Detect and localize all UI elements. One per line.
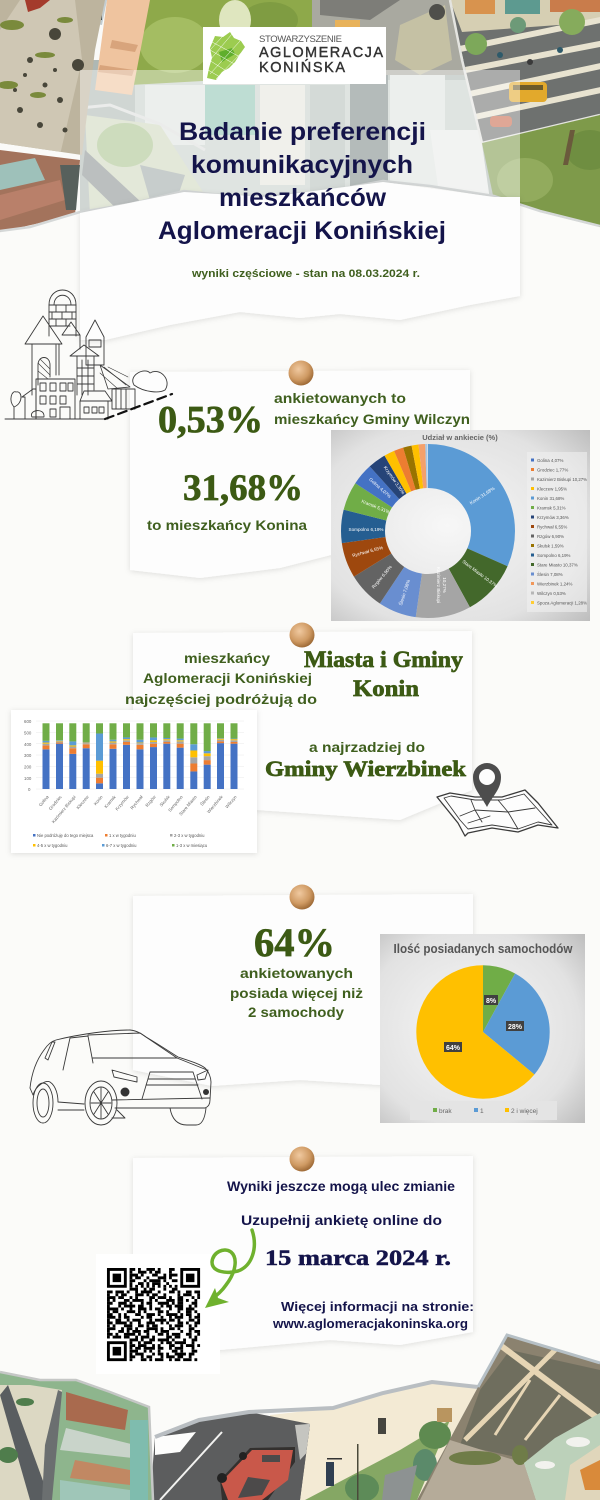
bar labels: Ślesin	[199, 794, 211, 807]
title	[158, 118, 446, 245]
donut legend: Grodziec 1,77%	[537, 468, 568, 472]
donut legend: Golina 4,07%	[537, 458, 563, 463]
green centre top	[130, 0, 320, 85]
bar legend: 1-3 x w miesiącu	[176, 843, 208, 848]
axis: 500	[24, 730, 32, 736]
illustration: buildings	[5, 290, 172, 419]
text: ankietowanych Wilczyn: ankietowanych to	[274, 391, 406, 406]
text: own more than 2 cars	[230, 966, 363, 1020]
icon: map with pin	[437, 763, 558, 836]
text: fill in survey: Uzupełnij ankietę online do	[241, 1213, 442, 1228]
donut labels	[348, 465, 498, 606]
bar labels: Rzgów	[144, 794, 157, 808]
pie labels: 64%	[446, 1045, 461, 1052]
donut legend: Kazimierz Biskupi 10,27%	[537, 477, 587, 482]
pie legend: 2 i więcej	[511, 1108, 538, 1115]
bar labels: Sompolno	[167, 794, 184, 813]
pin 1	[288, 360, 314, 386]
donut legend: Rzgów 6,90%	[537, 534, 564, 539]
donut labels: Rychwał 6,55%	[352, 545, 384, 558]
donut labels: Stare Miasto 10,37%	[461, 559, 498, 589]
title: Aglomeracji Konińskiej	[158, 217, 446, 245]
logo: STOWARZYSZENIE	[259, 34, 342, 45]
bar labels: Skulsk	[159, 794, 171, 808]
axis: 400	[24, 742, 32, 747]
stat: 0,53%: 0,53%	[158, 399, 263, 441]
text: results may change: Wyniki jeszcze mogą ulec zmianie	[227, 1179, 456, 1194]
donut legend: Kleczew 1,95%	[537, 486, 567, 492]
axis: 600	[24, 719, 32, 724]
text: more information: www.aglomeracjakoninska.org	[272, 1316, 468, 1331]
logo mark	[207, 32, 245, 80]
text: residents travel most often to: Aglomeracji Konińskiej	[143, 671, 312, 686]
right street piece	[450, 0, 600, 143]
bar labels: Kazimierz Biskupi	[51, 794, 77, 824]
text: own more than 2 cars: 2 samochody	[248, 1005, 345, 1020]
donut chart: share in survey: Udział w ankiecie (%)	[422, 433, 498, 442]
pie chart: number of cars: Ilość posiadanych samochodów	[394, 942, 573, 956]
park left middle	[85, 115, 205, 215]
pie labels	[444, 995, 524, 1052]
bar labels: Kleczew	[75, 794, 90, 810]
donut legend: Krzymów 3,36%	[537, 515, 569, 520]
donut legend: Kramsk 5,31%	[537, 506, 566, 510]
pin 4	[290, 1146, 314, 1172]
text: more information: Więcej informacji na stronie:	[281, 1299, 474, 1314]
pie slices	[450, 999, 516, 1065]
axis	[24, 719, 244, 792]
pie chart: number of cars	[380, 934, 585, 1123]
bar labels: Stare Miasto	[178, 794, 198, 817]
donut legend: Rychwał 6,55%	[537, 524, 567, 530]
pie legend	[410, 1101, 557, 1120]
heading: Gminy Wierzbinek: Gminy Wierzbinek	[265, 756, 467, 781]
panel: sheet 3	[133, 894, 473, 1086]
green lower right	[482, 115, 600, 232]
stat: 31,68%: 31,68%	[183, 468, 303, 509]
bar labels: Wierzbinek	[206, 794, 224, 814]
text: residents travel most often to: mieszkańcy	[184, 651, 271, 666]
sand and park	[270, 1382, 478, 1500]
stacked bar chart	[11, 710, 257, 853]
paper band: translucent title panel	[80, 70, 520, 240]
bar legend: Nie podróżuję do tego miejsca	[37, 833, 94, 838]
arrow: curly green to QR	[205, 1230, 254, 1308]
road	[150, 1412, 310, 1500]
bars	[42, 723, 238, 789]
donut legend	[527, 452, 587, 612]
left street piece	[0, 1372, 153, 1500]
heading: Miasta i Gminy Konin	[304, 647, 464, 701]
pie legend: 1	[480, 1108, 484, 1115]
donut chart: share in survey	[331, 430, 590, 621]
logo: KONIŃSKA	[259, 59, 345, 76]
bar legend: 4-5 x w tygodniu	[37, 843, 68, 848]
bar labels: Golina	[38, 794, 50, 807]
donut legend: Spoza Aglomeracji 1,28%	[537, 600, 587, 606]
pin 2	[290, 622, 314, 648]
bar labels: Konin	[93, 794, 104, 806]
bar labels: Rychwał	[129, 794, 144, 810]
green corner	[524, 1413, 600, 1500]
donut legend: Ślesin 7,08%	[537, 572, 563, 577]
bar legend: 1 x w tygodniu	[109, 833, 136, 838]
heading: Miasta i Gminy Konin: Miasta i Gminy	[304, 647, 464, 672]
text: own more than 2 cars: posiada więcej niż	[230, 986, 363, 1001]
bar labels: Krzymów	[114, 794, 130, 811]
text: residents travel most often to	[125, 651, 317, 707]
QR code	[96, 1254, 220, 1374]
bar legend	[33, 833, 208, 848]
donut labels: Rzgów 6,90%	[371, 565, 393, 589]
panel: sheet 4	[133, 1156, 473, 1350]
donut labels: Krzymów 3,36%	[383, 465, 406, 495]
panel: title sheet	[80, 182, 520, 340]
donut legend: Sompolno 6,19%	[537, 553, 571, 558]
bar labels: Wilczyn	[224, 794, 238, 809]
buildings centre	[80, 60, 500, 230]
title: komunikacyjnych	[191, 151, 413, 179]
axis: 100	[24, 776, 32, 781]
donut labels: Golina 4,07%	[368, 477, 392, 499]
heading: Miasta i Gminy Konin: Konin	[353, 676, 419, 701]
pin 3	[290, 884, 314, 910]
donut labels: Kazimierz Biskupi	[436, 567, 441, 603]
top collage: city seen from above	[0, 0, 600, 232]
bar labels: Kramsk	[103, 794, 117, 809]
text: least often: a najrzadziej do	[309, 740, 425, 755]
deadline: 15 marca 2024 r.	[265, 1245, 451, 1270]
donut legend: Wierzbinek 1,24%	[537, 582, 572, 586]
subtitle: wyniki częściowe - stan na 08.03.2024 r.	[191, 268, 420, 280]
bar legend: 2-3 x w tygodniu	[174, 833, 205, 838]
donut legend: Skulsk 1,59%	[537, 544, 564, 548]
logo	[203, 27, 386, 84]
axis: 300	[24, 753, 32, 758]
donut labels: Sompolno 6,19%	[348, 527, 384, 532]
road top centre	[312, 0, 465, 75]
bar labels: Grodziec	[48, 794, 63, 811]
bar labels	[38, 794, 238, 824]
axis: 200	[24, 764, 32, 770]
panel: sheet 1	[130, 370, 470, 578]
pink building	[95, 0, 150, 95]
bottom collage: city seen from above	[0, 1335, 600, 1500]
donut rings	[363, 466, 493, 596]
text: mieszkańcy Konina: to mieszkańcy Konina	[147, 518, 308, 533]
torn edge under centre buildings	[80, 105, 205, 150]
donut legend: Stare Miasto 10,37%	[537, 562, 578, 568]
pie labels: 28%	[508, 1024, 523, 1031]
red car	[220, 1447, 295, 1500]
pie legend: brak	[439, 1108, 452, 1115]
right tower piece	[417, 1335, 600, 1500]
text: ankietowanych Wilczyn	[274, 391, 470, 427]
torn edge highlight	[0, 181, 600, 231]
logo: AGLOMERACJA	[259, 45, 383, 61]
donut labels: Konin 31,68%	[469, 486, 496, 506]
text: own more than 2 cars: ankietowanych	[240, 966, 353, 981]
text: more information	[272, 1299, 474, 1331]
donut labels: Kramsk 5,31%	[361, 499, 390, 515]
title: Badanie preferencji	[179, 118, 426, 146]
axis: 0	[28, 787, 31, 792]
title: mieszkańców	[219, 184, 387, 212]
text: residents travel most often to: najczęściej podróżują do	[125, 692, 317, 707]
pie labels: 8%	[486, 998, 497, 1005]
red building left	[0, 150, 80, 232]
donut labels: Ślesin 7,08%	[396, 578, 411, 606]
road edge	[155, 1382, 478, 1437]
left street piece	[0, 0, 105, 155]
donut legend: Konin 31,68%	[537, 496, 564, 501]
stat: 64%: 64%	[254, 920, 335, 965]
text: ankietowanych Wilczyn: mieszkańcy Gminy Wilczyn	[274, 412, 470, 427]
illustration: car	[30, 1030, 211, 1125]
panel: sheet 2	[133, 631, 472, 820]
bar legend: 6-7 x w tygodniu	[106, 843, 137, 848]
donut labels: 10,27%	[442, 577, 447, 593]
donut legend: Wilczyn 0,53%	[537, 591, 566, 596]
